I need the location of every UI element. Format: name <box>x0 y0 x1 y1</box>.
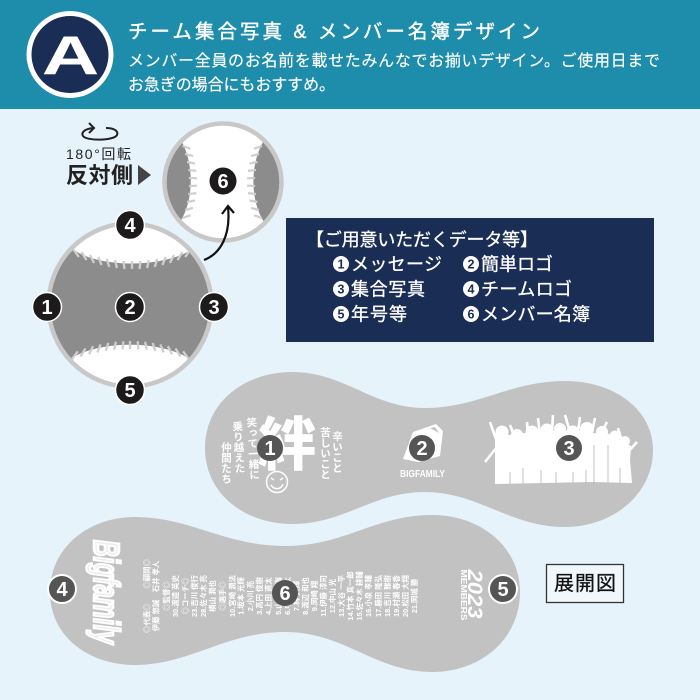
member list: 6.中村 健太 <box>283 577 292 615</box>
marker 3: 3 <box>563 438 575 460</box>
message artwork: 笑って一緒に <box>245 416 260 480</box>
marker 2 <box>116 292 144 322</box>
member list <box>142 558 419 633</box>
label: flat layout: 展開図 <box>554 573 616 595</box>
rotation note: 反対側 <box>66 163 133 188</box>
badge: A <box>26 11 114 98</box>
member list: ◎コーチ◎ <box>181 577 190 614</box>
marker 4 <box>48 575 76 603</box>
icon: triangle pointer <box>138 165 151 185</box>
member list: 30.渡邉 英史 <box>171 574 180 617</box>
marker 6 <box>210 168 236 194</box>
title: チーム集合写真 & メンバー名簿デザイン <box>128 21 540 43</box>
panel: required data <box>286 218 654 342</box>
marker 5: 5 <box>124 380 136 402</box>
member list: 20.松田 大翔 <box>401 575 410 617</box>
item 6: メンバー名簿 <box>481 304 590 324</box>
marker 3 <box>200 292 228 322</box>
marker 4: 4 <box>124 215 136 237</box>
member list: ◎監督◎ <box>162 581 171 611</box>
description: メンバー全員のお名前を載せたみんなでお揃いデザイン。ご使用日まで <box>128 51 660 70</box>
description: お急ぎの場合にもおすすめ。 <box>128 75 335 94</box>
item 1: 1 <box>338 258 345 272</box>
member list: 1.坂本 光輝 <box>236 577 246 615</box>
member list: 19.村瀬 春香 <box>392 574 401 617</box>
marker 5 <box>116 376 144 404</box>
marker 5: 5 <box>497 579 509 601</box>
year and members: MEMBERS <box>459 570 468 621</box>
member list: 5.山本 拓海 <box>274 577 283 615</box>
header band <box>0 0 700 109</box>
member list: ◎選手◎ <box>218 581 227 611</box>
message artwork: 仲間たち <box>220 441 232 484</box>
badge: A: A <box>42 24 99 86</box>
arrow: front to back <box>204 206 234 260</box>
baseball: front side <box>40 224 220 386</box>
message artwork: 苦しいこと <box>319 426 331 480</box>
member list: 9.岡崎 翔 <box>310 581 319 611</box>
message artwork: 絆 <box>258 413 316 478</box>
item 5: 年号等 <box>351 304 407 324</box>
marker 6 <box>272 580 298 606</box>
marker 4: 4 <box>56 579 68 601</box>
year and members: 2023 <box>463 568 486 619</box>
marker 5 <box>489 575 517 603</box>
marker 2: 2 <box>124 297 136 319</box>
item 2: 簡単ロゴ <box>481 254 553 274</box>
marker 3: 3 <box>208 297 220 319</box>
marker 1 <box>257 435 283 461</box>
description <box>128 51 660 94</box>
member list: 12.中山 光 <box>328 578 337 613</box>
member list: 4.上田 直太 <box>264 577 273 615</box>
message artwork: 辛いこと <box>331 430 343 473</box>
simple logo <box>400 424 445 480</box>
panel heading: 【ご用意いただくデータ等】 <box>306 230 538 250</box>
team photo silhouette <box>485 415 637 484</box>
baseball: back side <box>162 121 284 243</box>
message artwork: 乗り越えた <box>231 420 246 474</box>
member list: 14.竹本 真一郎 <box>346 571 355 621</box>
marker 4 <box>116 210 144 240</box>
member list: 7.林 大輝 <box>292 580 301 611</box>
flat layout: lower strip <box>48 515 520 672</box>
label: flat layout <box>546 564 624 602</box>
item 4: 4 <box>468 282 475 296</box>
item 5: 5 <box>338 308 345 322</box>
item 6: 6 <box>468 308 475 322</box>
simple logo: BIGFAMILY <box>400 469 445 480</box>
flat layout: upper strip <box>205 372 653 527</box>
member list: 15.佐々木 耕輔 <box>355 571 364 621</box>
member list: 21.岡城 勝 <box>410 578 419 613</box>
item 4: チームロゴ <box>481 280 572 300</box>
member list: 23.吉川 俊行 <box>190 574 199 617</box>
message artwork <box>220 413 343 492</box>
marker 1: 1 <box>264 438 276 460</box>
marker 2: 2 <box>416 438 428 460</box>
member list: 2.小川 亮 <box>246 580 255 611</box>
member list: 伊藤 悠誠 石井 孝人 <box>152 560 160 631</box>
member list: 28.佐々木 亮 <box>199 574 208 617</box>
icon: rotate arrow <box>82 123 117 140</box>
marker 2 <box>409 435 435 461</box>
item 3: 3 <box>338 282 345 296</box>
member list: 17.藤田 隆弘 <box>374 574 383 617</box>
member list: 8.渡辺 和也 <box>301 577 310 615</box>
rotation note: 180°回転 <box>66 146 131 162</box>
marker 6: 6 <box>217 171 229 193</box>
member list: ◎代表◎ ◎顧問◎ <box>142 558 152 633</box>
team logo: Bigfamily <box>86 540 127 645</box>
member list: 18.吉川 雅樹 <box>383 574 392 617</box>
member list: 3.高円 俊樹 <box>255 577 264 615</box>
marker 3 <box>556 435 582 461</box>
rotation note <box>66 123 151 188</box>
item 3: 集合写真 <box>351 280 425 300</box>
member list: 16.小泉 孝輔 <box>364 574 373 617</box>
member list: 13.大谷 一平 <box>337 574 346 617</box>
marker 1: 1 <box>41 297 53 319</box>
item 2: 2 <box>468 258 475 272</box>
item 1: メッセージ <box>351 254 442 274</box>
member list: 11.伊藤 淳司 <box>319 575 328 617</box>
member list: 10.宮崎 潤法 <box>228 574 237 617</box>
marker 1 <box>32 292 62 322</box>
marker 6: 6 <box>279 583 291 605</box>
member list: 横山 潤也 <box>208 580 217 612</box>
